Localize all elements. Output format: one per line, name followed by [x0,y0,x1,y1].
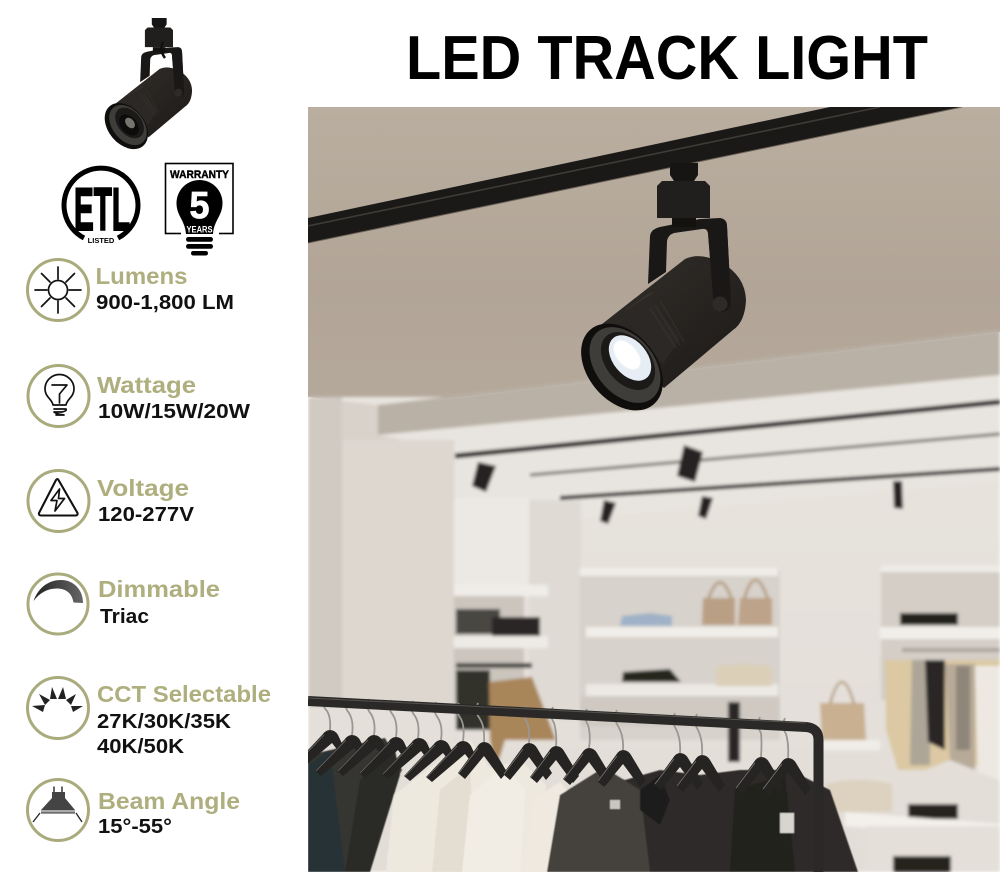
spec: wattage [28,366,250,426]
ceiling [308,107,1000,407]
icon: sunrise spikes [28,678,88,738]
lens glow [608,335,652,381]
value: wattage: 10W/15W/20W [98,401,250,423]
tote bag and displays [820,703,866,740]
spec: voltage [28,470,195,532]
icon: product track light [96,18,192,158]
value: dimmable: Triac [100,606,149,628]
icon: 5 year warranty badge [166,164,233,256]
clothes rack rail [308,698,818,872]
label: lumens: Lumens [96,263,188,289]
icon: light bulb [28,366,89,426]
icon: dimming arc [28,574,88,634]
track light fixture [581,163,746,410]
label: dimmable: Dimmable [98,576,220,602]
icon: 5 year warranty badge: 5 [190,185,210,227]
icon: sun [28,260,88,320]
spec: beam angle [28,780,240,840]
label: beam angle: Beam Angle [98,788,240,814]
value: lumens: 900-1,800 LM [96,292,234,314]
left shelf unit [454,592,524,702]
photo: retail store interior [293,107,1000,872]
label: CCT selectable: CCT Selectable [97,681,271,707]
value: voltage: 120-277V [98,504,195,526]
clothes rack garments [308,738,858,872]
icon: 5 year warranty badge: WARRANTY [170,169,230,181]
icon: lightning triangle [28,470,89,532]
icon: spot bulb beam [28,780,88,840]
spec: lumens [28,260,234,320]
value: CCT line one: 27K/30K/35K [97,711,232,733]
main ceiling track [308,107,962,243]
title: LED TRACK LIGHT [406,24,928,93]
spec: CCT selectable [28,678,271,758]
value: beam angle: 15°-55° [98,816,172,838]
icon: ETL listed mark [64,168,138,245]
middle shelf unit [580,570,780,740]
spec: dimmable [28,574,220,634]
hangers [293,697,811,795]
label: voltage: Voltage [97,475,189,501]
back room (blurred) [308,330,1000,872]
icon: 5 year warranty badge: YEARS [186,224,212,236]
distant track heads [472,462,496,492]
icon: ETL listed mark: LISTED [88,236,115,245]
label: wattage: Wattage [97,372,196,398]
icon: ETL listed mark: ETL [74,176,130,243]
distant tracks [455,402,1000,456]
right shelf unit [881,570,1000,700]
value: CCT line two: 40K/50K [97,736,185,758]
